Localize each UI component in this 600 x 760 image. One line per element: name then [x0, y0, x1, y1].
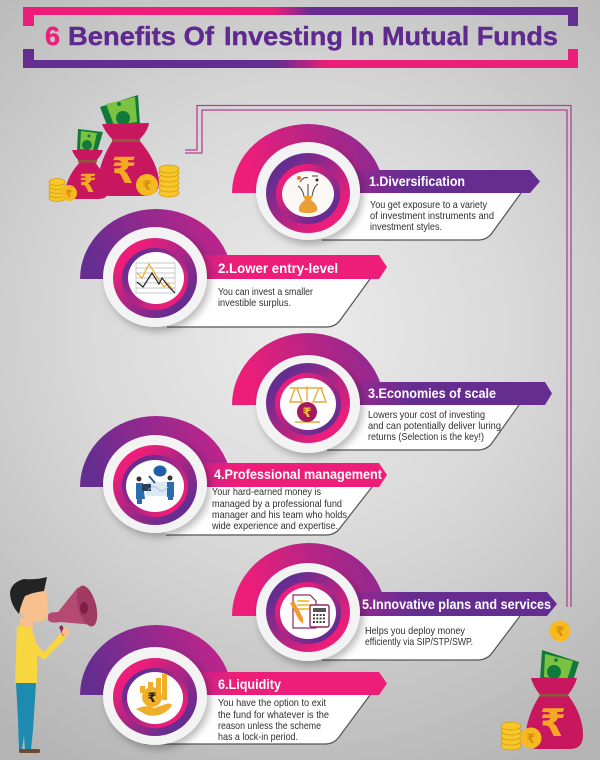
torso and arm	[15, 626, 66, 683]
arch	[80, 416, 232, 487]
description card	[308, 616, 520, 660]
inner ring	[122, 455, 188, 517]
falling coin: ₹	[555, 625, 565, 640]
body text	[368, 409, 501, 443]
heading: 5.Innovative plans and services	[362, 596, 551, 612]
body text: Your hard-earned money is	[212, 486, 321, 498]
title text: 6	[45, 21, 60, 51]
heading: 3.Economies of scale	[368, 385, 496, 401]
illustration: money bag bottom right	[501, 620, 583, 750]
description card	[308, 193, 521, 240]
coin large: ₹	[142, 179, 152, 194]
body text: the fund for whatever is the	[218, 709, 329, 721]
white disc	[103, 647, 207, 745]
panel: 6 Liquidity	[80, 625, 387, 745]
illustration: man with megaphone	[10, 577, 101, 753]
icon: coin on hand with bars	[136, 674, 172, 716]
body text	[211, 486, 347, 532]
inner ring	[276, 164, 340, 224]
body text: manager and his team who holds	[212, 509, 347, 521]
heading ribbon	[350, 170, 540, 193]
coin stack left	[49, 178, 65, 202]
icon: document and calculator	[290, 595, 329, 628]
body text: returns (Selection is the key!)	[368, 431, 484, 443]
body text: managed by a professional fund	[212, 498, 342, 510]
icon: team of managers	[136, 466, 174, 504]
heading ribbon	[350, 592, 557, 616]
description card	[155, 487, 372, 535]
description card	[155, 279, 370, 327]
title text: Benefits Of	[68, 21, 214, 51]
head	[20, 590, 48, 622]
arch	[80, 209, 232, 279]
icon disc	[127, 672, 183, 724]
inner ring	[275, 373, 341, 435]
body text	[218, 697, 329, 743]
outer ring	[266, 153, 350, 233]
icon: line chart	[136, 263, 175, 293]
panel: 3 Economies of scale	[232, 333, 552, 453]
small bag: ₹	[79, 169, 97, 198]
banner bottom frame	[23, 49, 578, 68]
body text	[365, 625, 473, 648]
body text: investible surplus.	[218, 297, 291, 309]
big bag: ₹	[111, 151, 137, 192]
shoes	[19, 749, 40, 753]
arch	[232, 543, 386, 616]
connector double line	[185, 106, 571, 607]
outer ring	[266, 363, 350, 443]
panel: 2 Lower entry-level	[80, 209, 387, 327]
body text: has a lock-in period.	[218, 731, 298, 743]
icon disc	[280, 587, 336, 639]
body text: You can invest a smaller	[218, 286, 313, 298]
inner ring	[122, 248, 188, 310]
coin stack	[501, 722, 521, 750]
body text: and can potentially deliver luring	[368, 420, 501, 432]
body text: You have the option to exit	[218, 697, 326, 709]
arch	[232, 333, 384, 405]
heading ribbon	[350, 382, 552, 405]
title banner	[23, 7, 578, 68]
panel: 4 Professional management	[80, 416, 387, 535]
icon: balance scale	[290, 386, 326, 422]
heading: 1.Diversification	[369, 173, 465, 189]
body text: Helps you deploy money	[365, 625, 466, 637]
white disc	[103, 227, 207, 327]
body text: of investment instruments and	[370, 210, 494, 222]
icon disc	[280, 378, 336, 430]
icon: coin on hand with bars: ₹	[147, 691, 157, 706]
heading: 4.Professional management	[214, 466, 382, 482]
body text: reason unless the scheme	[218, 720, 321, 732]
jeans	[16, 683, 36, 750]
heading ribbon	[197, 463, 387, 487]
body text: Lowers your cost of investing	[368, 409, 485, 421]
body text: wide experience and expertise.	[211, 520, 338, 532]
panel: 1 Diversification	[232, 124, 540, 240]
heading ribbon	[197, 255, 387, 279]
icon disc	[128, 252, 184, 304]
outer ring	[113, 238, 197, 318]
coin small: ₹	[66, 189, 73, 200]
inner ring	[122, 668, 188, 728]
body text: You get exposure to a variety	[370, 199, 488, 211]
icon disc	[282, 171, 334, 217]
icon disc	[126, 460, 184, 512]
body text	[370, 199, 494, 233]
arch	[80, 625, 232, 695]
hair	[10, 577, 47, 614]
panel: 5 Innovative plans and services	[232, 543, 557, 661]
illustration: money bags top left	[49, 95, 179, 202]
arch	[232, 124, 384, 193]
hand	[62, 628, 70, 636]
neck	[20, 618, 33, 630]
big cash	[100, 95, 140, 128]
heading ribbon	[197, 672, 387, 695]
icon: money bag with branches	[297, 176, 318, 213]
megaphone	[48, 583, 101, 636]
coin: ₹	[526, 732, 536, 747]
banner top frame	[23, 7, 578, 26]
coin stack right	[159, 165, 179, 197]
white disc	[103, 435, 207, 533]
white disc	[256, 563, 360, 661]
title text	[45, 21, 558, 51]
outer ring	[266, 572, 350, 652]
small cash	[77, 129, 103, 152]
body text	[218, 286, 313, 309]
bag: ₹	[540, 701, 566, 745]
heading: 6.Liquidity	[218, 676, 281, 692]
description card	[308, 405, 519, 450]
cash	[540, 650, 579, 684]
body text: efficiently via SIP/STP/SWP.	[365, 636, 473, 648]
icon: balance scale: ₹	[302, 406, 312, 421]
title text: Investing In Mutual Funds	[224, 21, 558, 51]
white disc	[256, 355, 360, 453]
inner ring	[275, 582, 341, 644]
description card	[145, 695, 370, 744]
white disc	[256, 142, 360, 240]
outer ring	[113, 445, 197, 525]
body text: investment styles.	[370, 221, 442, 233]
heading: 2.Lower entry-level	[218, 260, 338, 276]
outer ring	[113, 658, 197, 736]
